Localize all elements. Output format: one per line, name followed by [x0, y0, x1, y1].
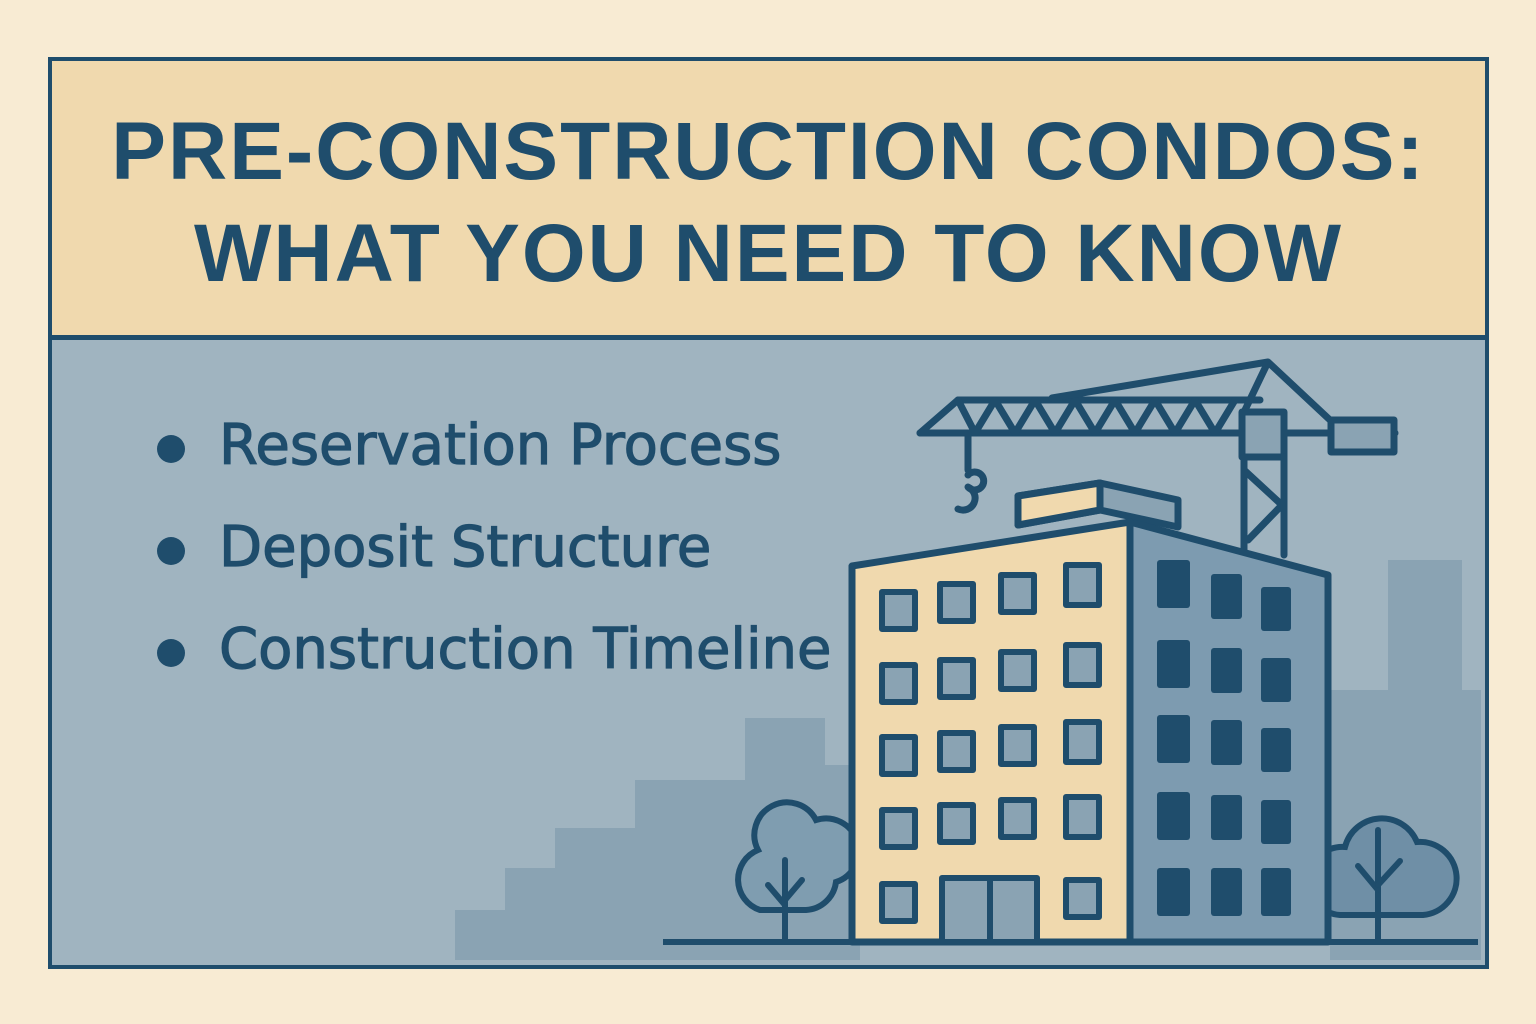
header band	[52, 61, 1485, 340]
title	[111, 106, 1426, 299]
bullet: reservation: Reservation Process	[219, 413, 781, 478]
crane	[920, 362, 1395, 555]
bullet: deposit: Deposit Structure	[219, 515, 711, 580]
ground line	[663, 939, 1478, 945]
title: PRE-CONSTRUCTION CONDOS:	[111, 106, 1426, 197]
bullet list	[157, 413, 831, 682]
bullet: timeline: Construction Timeline	[219, 617, 831, 682]
tree right	[1308, 818, 1457, 940]
title: WHAT YOU NEED TO KNOW	[194, 208, 1343, 299]
building	[852, 483, 1328, 942]
background city	[455, 560, 1481, 960]
tree left	[738, 802, 859, 940]
